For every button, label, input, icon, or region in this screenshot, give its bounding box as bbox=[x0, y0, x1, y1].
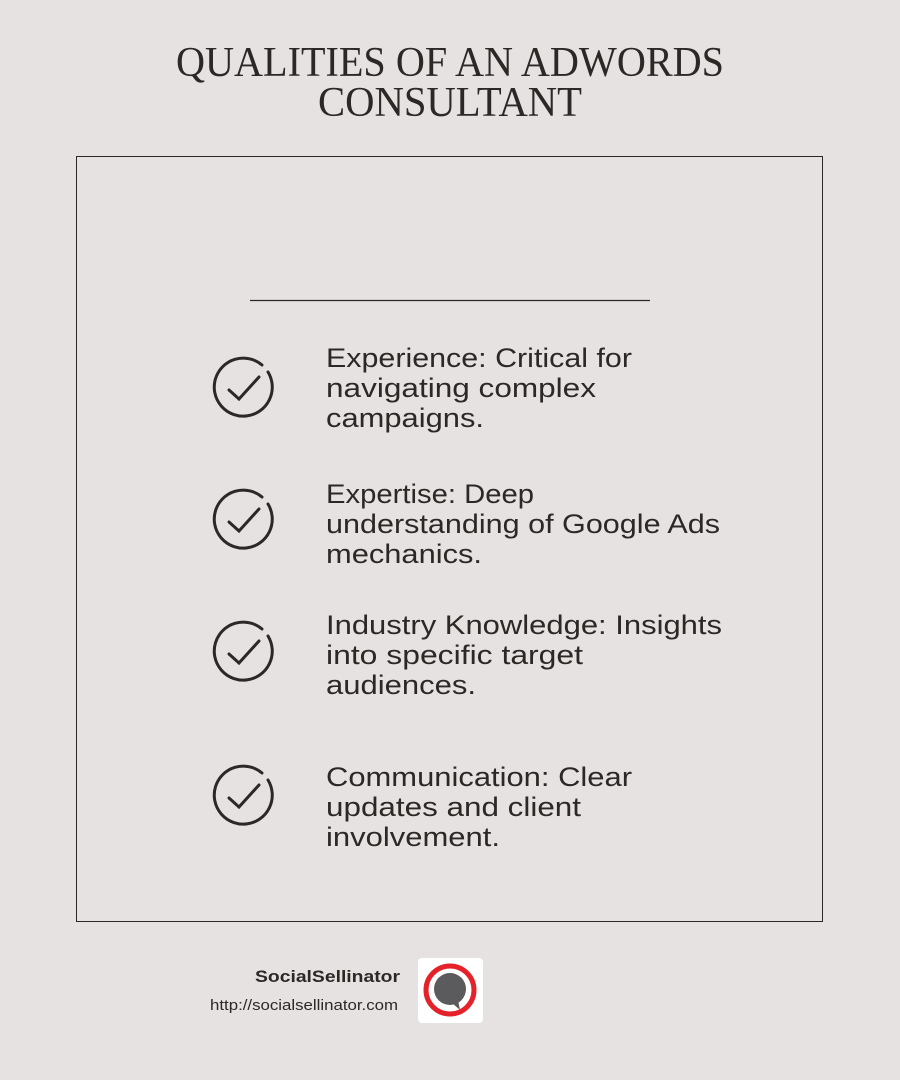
item: experience: campaigns. bbox=[326, 403, 484, 433]
item: industry knowledge: Industry Knowledge: Insights bbox=[326, 610, 722, 640]
item: expertise: understanding of Google Ads bbox=[326, 509, 720, 539]
item: industry knowledge: audiences. bbox=[326, 670, 476, 700]
icon: check circle bbox=[214, 358, 272, 416]
item: communication: updates and client bbox=[326, 792, 582, 822]
footer brand text: http://socialsellinator.com bbox=[210, 997, 398, 1014]
footer brand text bbox=[210, 967, 400, 1014]
item: communication bbox=[214, 762, 632, 852]
footer brand text: SocialSellinator bbox=[255, 967, 400, 986]
icon: check circle bbox=[214, 766, 272, 824]
title: CONSULTANT bbox=[318, 80, 582, 126]
panel: qualities list bbox=[76, 156, 822, 922]
item: industry knowledge bbox=[214, 610, 722, 700]
item: experience bbox=[214, 343, 632, 433]
title bbox=[176, 40, 724, 126]
item: experience: Experience: Critical for bbox=[326, 343, 632, 373]
item: experience: navigating complex bbox=[326, 373, 597, 403]
title: QUALITIES OF AN ADWORDS bbox=[176, 40, 724, 86]
icon: check circle bbox=[214, 490, 272, 548]
item: expertise: Expertise: Deep bbox=[326, 479, 534, 509]
item: expertise: mechanics. bbox=[326, 539, 482, 569]
item: industry knowledge: into specific target bbox=[326, 640, 584, 670]
logo bbox=[418, 958, 483, 1023]
item: expertise bbox=[214, 479, 720, 569]
icon: check circle bbox=[214, 622, 272, 680]
item: communication: Communication: Clear bbox=[326, 762, 632, 792]
item: communication: involvement. bbox=[326, 822, 500, 852]
